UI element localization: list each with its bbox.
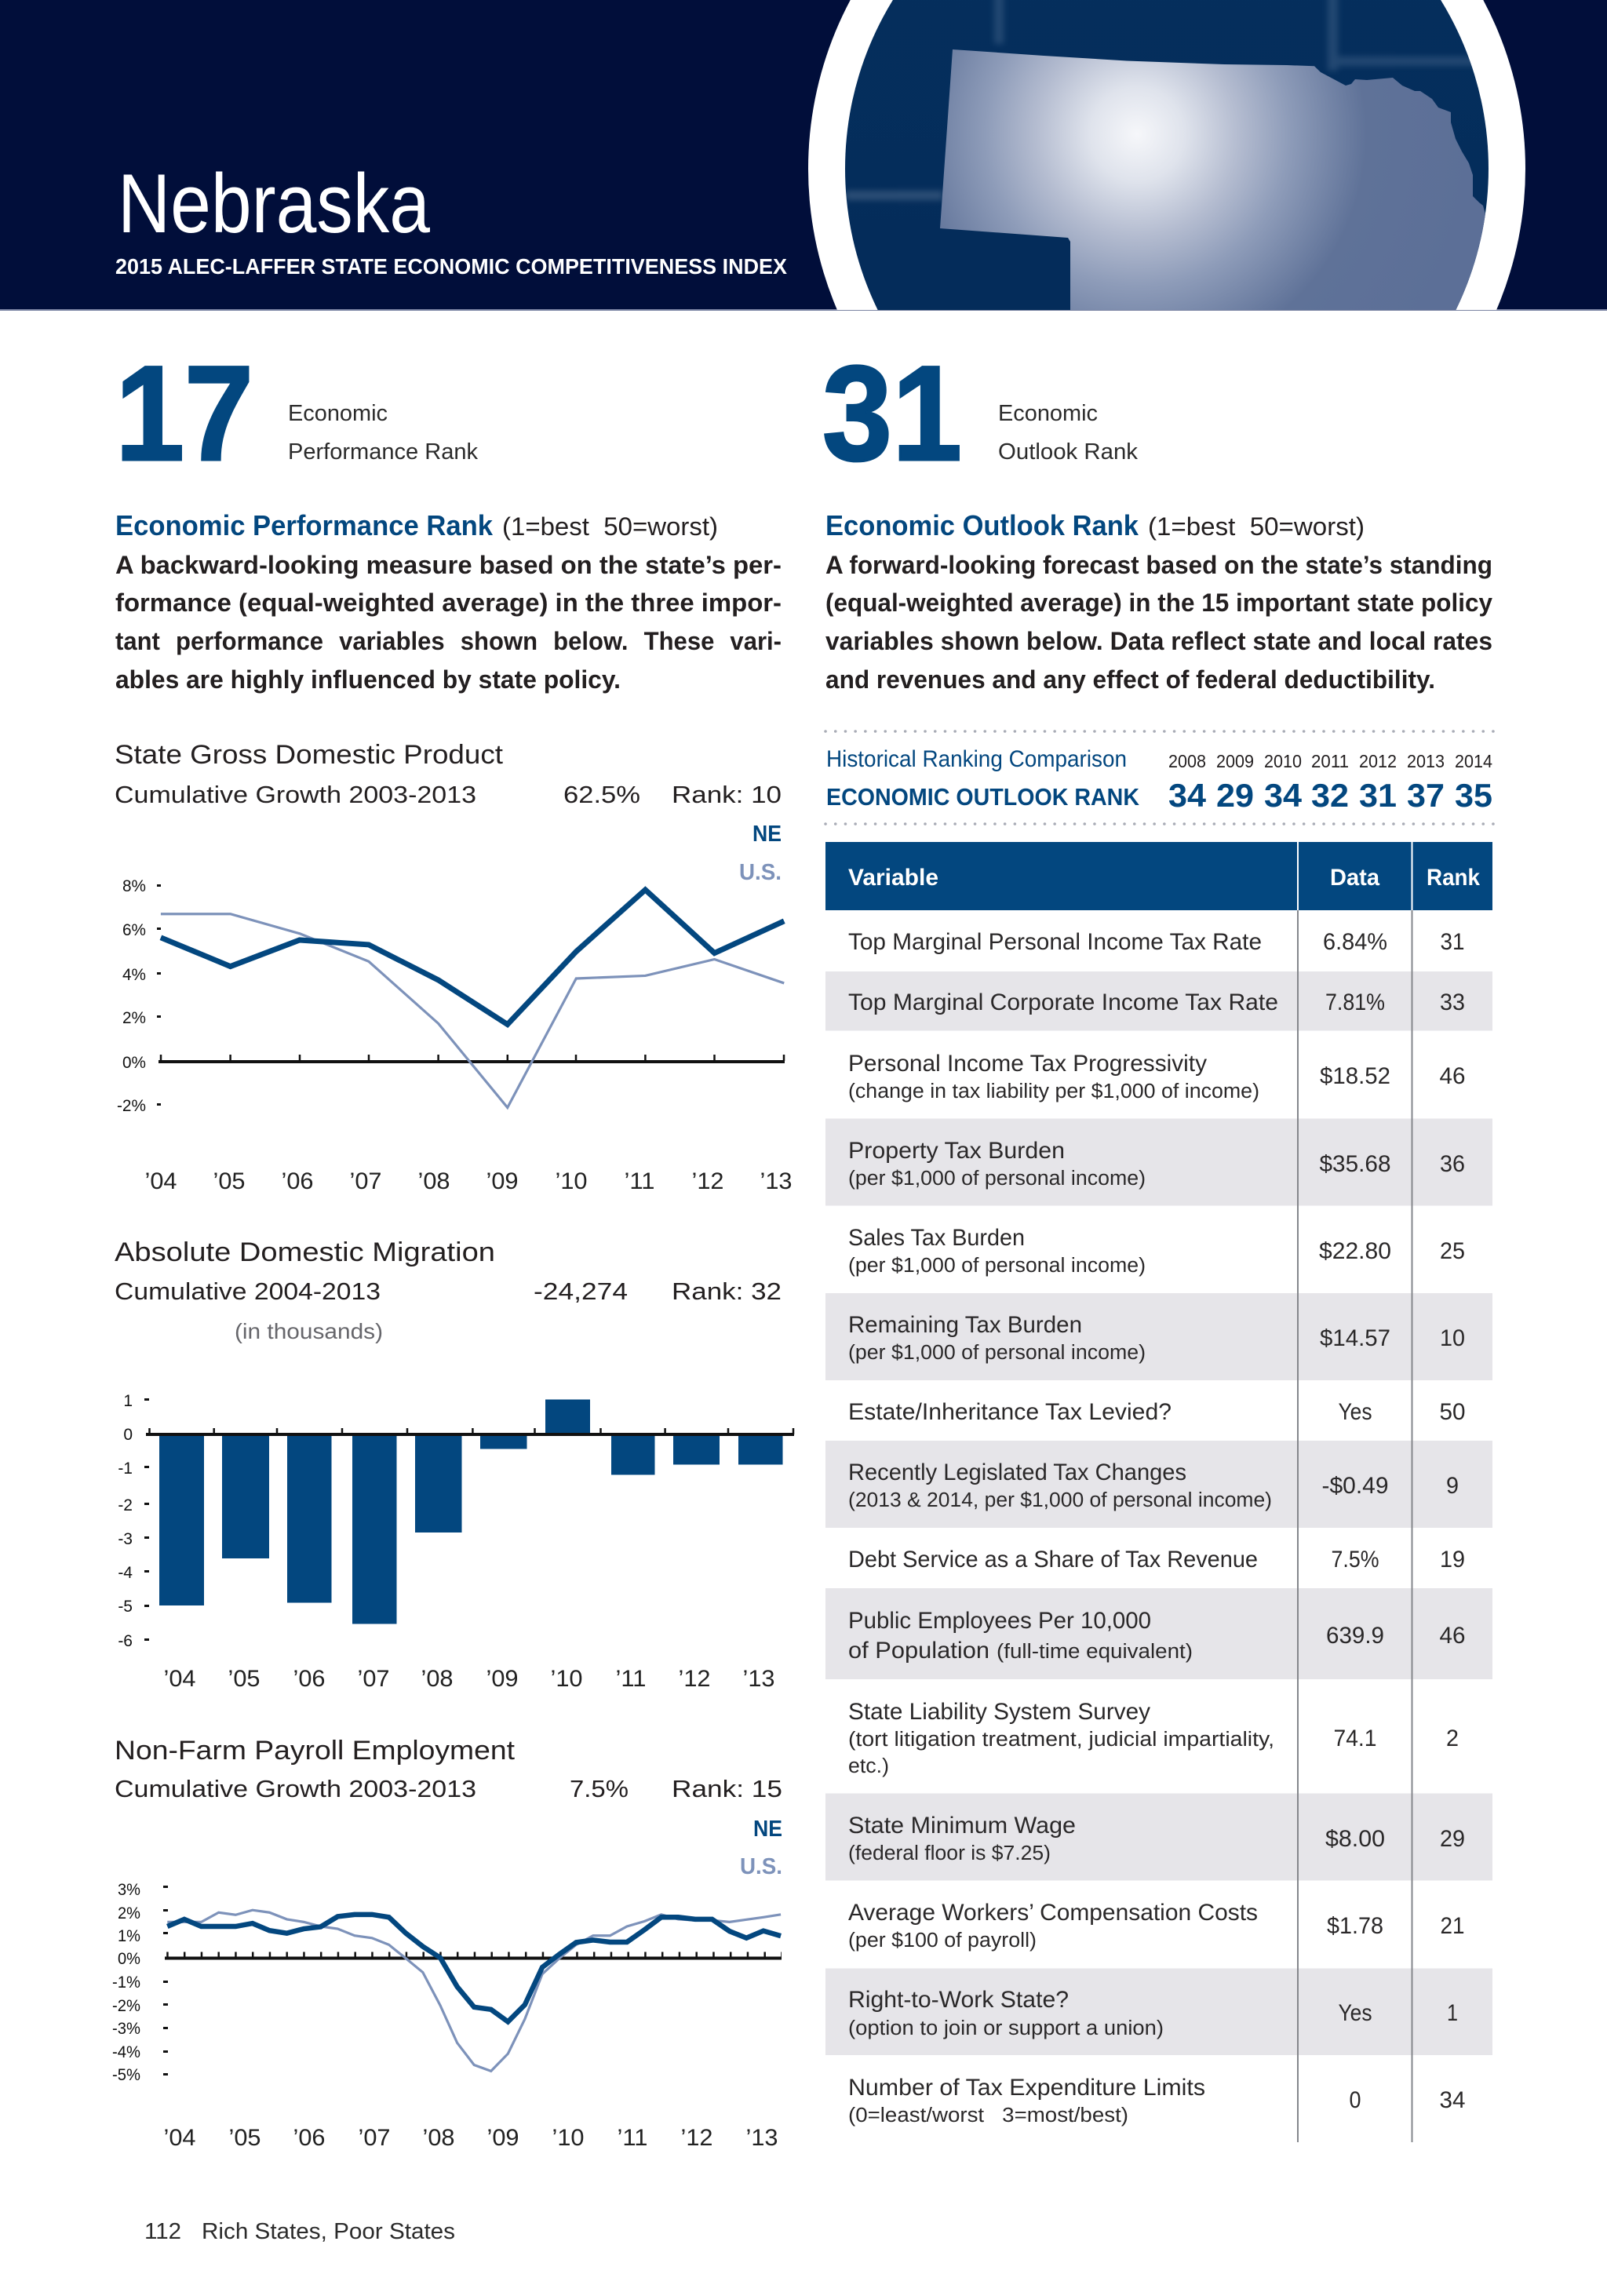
row: state liability system survey: etc.)	[848, 1755, 889, 1777]
row: number of tax expenditure limits	[848, 2075, 1466, 2127]
heading: Cumulative 2004-2013	[115, 1278, 381, 1305]
row: state minimum wage	[848, 1813, 1465, 1864]
line chart: payroll growth: ’04	[163, 2125, 196, 2151]
row: top marginal personal income tax rate: Top Marginal Personal Income Tax Rate	[848, 929, 1262, 955]
row: public employees per 10,000: 46	[1439, 1623, 1466, 1649]
row: debt service share of tax revenue	[848, 1547, 1465, 1573]
line chart: GDP growth	[117, 877, 793, 1194]
row: property tax burden: $35.68	[1320, 1151, 1390, 1177]
yearly rank numbers: 35	[1455, 777, 1492, 814]
text block: economic performance description: ables are highly influenced by state policy.	[115, 665, 621, 694]
line chart: GDP growth: ’06	[281, 1168, 314, 1194]
row: top marginal personal income tax rate: 31	[1441, 929, 1464, 955]
year labels: 2009	[1216, 751, 1254, 771]
row: average workers' compensation costs: 21	[1441, 1913, 1464, 1939]
text block: economic performance description: tant performance variables shown below. These vari-	[115, 627, 782, 655]
subtitle: 2015 ALEC-LAFFER STATE ECONOMIC COMPETITIVENESS INDEX	[115, 254, 787, 279]
year labels	[1168, 751, 1492, 771]
row: remaining tax burden: 10	[1440, 1325, 1465, 1351]
legend: U.S.	[740, 1854, 782, 1879]
text block: economic outlook description	[825, 509, 1492, 694]
year labels: 2012	[1359, 751, 1397, 771]
row: right-to-work state	[848, 1987, 1458, 2039]
heading: -24,274	[534, 1278, 628, 1305]
row: state liability system survey: (tort litigation treatment, judicial impartiality,	[848, 1729, 1274, 1751]
row: property tax burden: (per $1,000 of personal income)	[848, 1168, 1146, 1190]
line chart: GDP growth: ’09	[486, 1168, 518, 1194]
row: remaining tax burden: Remaining Tax Burden	[848, 1312, 1082, 1338]
heading: Rank: 15	[672, 1776, 782, 1802]
bar chart: migration: -6	[118, 1632, 133, 1650]
row: average workers' compensation costs	[848, 1900, 1464, 1952]
table header: Rank	[1427, 865, 1480, 891]
table: state policy variables	[825, 842, 1492, 2142]
row: state liability system survey: 2	[1446, 1726, 1459, 1751]
row: personal income tax progressivity: 46	[1439, 1063, 1466, 1089]
row: personal income tax progressivity: $18.52	[1320, 1063, 1390, 1089]
line chart: GDP growth: ’04	[144, 1168, 177, 1194]
row: estate/inheritance tax levied: Yes	[1339, 1399, 1372, 1425]
rank: economic performance 17: Performance Rank	[288, 439, 478, 465]
icon: Nebraska silhouette	[940, 49, 1495, 310]
text block: economic performance description: (1=best 50=worst)	[502, 512, 718, 541]
row: recently legislated tax changes: (2013 & 2014, per $1,000 of personal income)	[848, 1489, 1272, 1511]
row: remaining tax burden: $14.57	[1320, 1325, 1390, 1351]
row: sales tax burden	[848, 1225, 1465, 1277]
bar chart: migration: 1	[123, 1392, 133, 1410]
row: top marginal corporate income tax rate: Top Marginal Corporate Income Tax Rate	[848, 989, 1278, 1015]
line chart: GDP growth: ’08	[417, 1168, 450, 1194]
line chart: GDP growth: ’10	[556, 1168, 587, 1194]
text block: economic outlook description: (equal-weighted average) in the 15 important state policy	[825, 589, 1492, 617]
row: debt service share of tax revenue: 7.5%	[1331, 1547, 1379, 1573]
line chart: payroll growth: 2%	[118, 1904, 140, 1922]
bar chart: migration: ’07	[358, 1666, 389, 1692]
line chart: payroll growth: -2%	[112, 1997, 140, 2015]
row: top marginal corporate income tax rate: 33	[1440, 989, 1465, 1015]
line chart: payroll growth: ’12	[681, 2125, 712, 2151]
row: public employees per 10,000	[848, 1608, 1466, 1664]
row: state minimum wage: 29	[1440, 1826, 1465, 1852]
row: state minimum wage: $8.00	[1325, 1826, 1385, 1852]
row: debt service share of tax revenue: 19	[1440, 1547, 1465, 1573]
row: top marginal corporate income tax rate: 7.81%	[1325, 989, 1385, 1015]
row: personal income tax progressivity: Personal Income Tax Progressivity	[848, 1051, 1207, 1077]
row: public employees per 10,000: 639.9	[1326, 1623, 1384, 1649]
text block: economic performance description	[115, 509, 782, 694]
line chart: GDP growth: ’12	[692, 1168, 723, 1194]
table header: Data	[1330, 865, 1379, 891]
line chart: payroll growth: -3%	[112, 2020, 140, 2038]
year labels: 2008	[1168, 751, 1206, 771]
line chart: payroll growth: ’08	[422, 2125, 455, 2151]
panel: historical ranking comparison: ECONOMIC OUTLOOK RANK	[826, 783, 1140, 811]
bar chart: migration: ’05	[228, 1666, 261, 1692]
footer: 112	[144, 2219, 181, 2244]
bar chart: migration: -3	[118, 1530, 133, 1548]
heading	[115, 1736, 782, 1802]
heading: Absolute Domestic Migration	[115, 1237, 495, 1267]
year labels: 2014	[1455, 751, 1492, 771]
legend	[739, 822, 782, 885]
heading: State Gross Domestic Product	[115, 740, 504, 770]
row: property tax burden: 36	[1440, 1151, 1465, 1177]
row: number of tax expenditure limits: 34	[1439, 2087, 1466, 2113]
bar chart: migration: -2	[118, 1496, 133, 1514]
line chart: payroll growth: ’13	[745, 2125, 778, 2151]
legend: NE	[753, 1817, 782, 1842]
row: sales tax burden: $22.80	[1319, 1238, 1391, 1264]
text block: economic performance description: A backward-looking measure based on the state’s per-	[115, 551, 782, 579]
table header	[825, 842, 1492, 910]
rank: economic performance 17: 17	[115, 338, 253, 489]
heading: Cumulative Growth 2003-2013	[115, 1776, 476, 1802]
row: remaining tax burden: (per $1,000 of personal income)	[848, 1342, 1146, 1364]
panel: absolute domestic migration	[115, 1237, 794, 1692]
line chart: payroll growth: ’07	[358, 2125, 391, 2151]
line chart: payroll growth: -1%	[112, 1973, 140, 1992]
heading: 62.5%	[563, 782, 640, 808]
rank: economic outlook 31: 31	[822, 338, 962, 489]
row: state minimum wage: (federal floor is $7.25)	[848, 1842, 1051, 1864]
line chart: payroll growth: ’09	[486, 2125, 519, 2151]
row: sales tax burden: 25	[1440, 1238, 1465, 1264]
line chart: GDP growth: 0%	[122, 1054, 146, 1072]
text block: economic outlook description: (1=best 50=worst)	[1148, 512, 1365, 541]
line chart: GDP growth: -2%	[117, 1097, 146, 1115]
line chart: payroll growth: -4%	[112, 2043, 140, 2061]
title: Nebraska	[118, 156, 430, 250]
row: top marginal personal income tax rate	[848, 929, 1464, 955]
row: recently legislated tax changes	[848, 1460, 1459, 1511]
line chart: GDP growth: 4%	[122, 966, 146, 984]
row: recently legislated tax changes: -$0.49	[1321, 1473, 1389, 1499]
line chart: payroll growth: ’10	[552, 2125, 584, 2151]
row: estate/inheritance tax levied: 50	[1439, 1399, 1466, 1425]
line chart: payroll growth: 0%	[118, 1950, 140, 1968]
row: public employees per 10,000: (full-time equivalent)	[997, 1641, 1193, 1663]
legend: NE	[752, 822, 782, 847]
text block: economic outlook description: and revenues and any effect of federal deductibility.	[825, 665, 1435, 694]
heading: Cumulative Growth 2003-2013	[115, 782, 476, 808]
row: top marginal corporate income tax rate	[848, 989, 1465, 1015]
footer: Rich States, Poor States	[202, 2219, 455, 2244]
line chart: payroll growth: ’06	[293, 2125, 325, 2151]
row: public employees per 10,000: of Population	[848, 1638, 989, 1664]
line chart: GDP growth: ’13	[760, 1168, 793, 1194]
row: number of tax expenditure limits: 0	[1350, 2087, 1361, 2113]
yearly rank numbers: 37	[1407, 777, 1445, 814]
table header: Variable	[848, 865, 938, 891]
line chart: GDP growth: ’07	[350, 1168, 381, 1194]
state map medallion	[808, 0, 1525, 310]
row: sales tax burden: Sales Tax Burden	[848, 1225, 1025, 1251]
row: public employees per 10,000: Public Employees Per 10,000	[848, 1608, 1151, 1634]
heading: Non-Farm Payroll Employment	[115, 1736, 516, 1766]
row: top marginal personal income tax rate: 6.84%	[1323, 929, 1387, 955]
rank: economic outlook 31	[822, 338, 1139, 489]
row: state minimum wage: State Minimum Wage	[848, 1813, 1076, 1839]
line chart: GDP growth: 6%	[122, 921, 146, 939]
bar chart: migration: ’10	[551, 1666, 582, 1692]
yearly rank numbers: 34	[1264, 777, 1303, 814]
heading	[115, 740, 782, 808]
row: right-to-work state: Right-to-Work State?	[848, 1987, 1069, 2013]
row: state liability system survey	[848, 1699, 1459, 1777]
row: remaining tax burden	[848, 1312, 1465, 1364]
panel: historical ranking comparison: Historical Ranking Comparison	[826, 746, 1127, 772]
heading: 7.5%	[570, 1776, 629, 1802]
yearly rank numbers: 34	[1168, 777, 1207, 814]
yearly rank numbers: 32	[1311, 777, 1349, 814]
text block: economic performance description: Economic Performance Rank	[115, 509, 494, 541]
line chart: GDP growth: ’05	[213, 1168, 245, 1194]
row: sales tax burden: (per $1,000 of personal income)	[848, 1255, 1146, 1277]
rank: economic performance 17: Economic	[288, 401, 388, 426]
text block: economic outlook description: Economic Outlook Rank	[825, 509, 1139, 541]
row: personal income tax progressivity	[848, 1051, 1466, 1102]
line chart: payroll growth: 1%	[118, 1927, 140, 1945]
row: recently legislated tax changes: Recently Legislated Tax Changes	[848, 1460, 1186, 1485]
line chart: payroll growth	[112, 1881, 782, 2151]
line chart: payroll growth: ’11	[617, 2125, 648, 2151]
row: estate/inheritance tax levied	[848, 1399, 1466, 1425]
row: debt service share of tax revenue: Debt Service as a Share of Tax Revenue	[848, 1547, 1258, 1573]
bar chart: migration: ’12	[678, 1666, 711, 1692]
header banner	[0, 0, 1607, 311]
year labels: 2013	[1407, 751, 1445, 771]
text block: economic performance description: formance (equal-weighted average) in the three impor-	[115, 589, 782, 617]
yearly rank numbers	[1168, 777, 1492, 814]
heading: Rank: 32	[672, 1278, 782, 1305]
yearly rank numbers: 29	[1216, 777, 1254, 814]
heading	[115, 1237, 782, 1343]
bar chart: migration: ’06	[293, 1666, 325, 1692]
legend: U.S.	[739, 860, 782, 885]
bar chart: migration: -1	[118, 1460, 133, 1478]
heading: (in thousands)	[235, 1319, 383, 1343]
line chart: GDP growth: 8%	[122, 877, 146, 895]
text block: economic outlook description: variables shown below. Data reflect state and local rates	[825, 627, 1492, 655]
line chart: payroll growth: 3%	[118, 1881, 140, 1899]
row: right-to-work state: Yes	[1339, 2000, 1372, 2026]
bar chart: migration: ’13	[742, 1666, 775, 1692]
bar chart: migration: ’04	[163, 1666, 196, 1692]
row: average workers' compensation costs: (per $100 of payroll)	[848, 1930, 1037, 1952]
bar chart: migration	[118, 1392, 794, 1692]
text block: economic outlook description: A forward-looking forecast based on the state’s standing	[825, 551, 1492, 579]
row: average workers' compensation costs: $1.78	[1327, 1913, 1383, 1939]
panel: non-farm payroll employment	[112, 1736, 782, 2151]
row: property tax burden	[848, 1138, 1465, 1190]
panel: state gross domestic product	[115, 740, 793, 1194]
bar chart: migration: ’09	[486, 1666, 518, 1692]
row: number of tax expenditure limits: Number of Tax Expenditure Limits	[848, 2075, 1205, 2101]
bar chart: migration: ’11	[615, 1666, 647, 1692]
bar chart: migration: 0	[123, 1426, 133, 1444]
row: right-to-work state: 1	[1447, 2000, 1458, 2026]
rank: economic outlook 31: Economic	[998, 401, 1098, 426]
row: state liability system survey: State Liability System Survey	[848, 1699, 1150, 1725]
row: right-to-work state: (option to join or support a union)	[848, 2017, 1164, 2039]
row: number of tax expenditure limits: (0=least/worst 3=most/best)	[848, 2105, 1128, 2127]
line chart: payroll growth: -5%	[112, 2066, 140, 2084]
heading: Rank: 10	[672, 782, 782, 808]
legend	[740, 1817, 782, 1879]
panel: historical ranking comparison	[825, 731, 1493, 824]
rank: economic performance 17	[115, 338, 478, 489]
row: state liability system survey: 74.1	[1334, 1726, 1376, 1751]
bar chart: migration: -4	[118, 1564, 133, 1582]
bar chart: migration: -5	[118, 1598, 133, 1616]
table row stripes	[825, 971, 1492, 2055]
row: estate/inheritance tax levied: Estate/Inheritance Tax Levied?	[848, 1399, 1172, 1425]
line chart: GDP growth: ’11	[625, 1168, 654, 1194]
rank: economic outlook 31: Outlook Rank	[998, 439, 1139, 465]
bar chart: migration: ’08	[421, 1666, 454, 1692]
line chart: payroll growth: ’05	[229, 2125, 261, 2151]
row: average workers' compensation costs: Average Workers’ Compensation Costs	[848, 1900, 1258, 1926]
year labels: 2010	[1264, 751, 1302, 771]
yearly rank numbers: 31	[1359, 777, 1397, 814]
row: personal income tax progressivity: (change in tax liability per $1,000 of income)	[848, 1081, 1259, 1102]
line chart: GDP growth: 2%	[122, 1009, 146, 1027]
year labels: 2011	[1311, 751, 1349, 771]
row: recently legislated tax changes: 9	[1446, 1473, 1459, 1499]
row: property tax burden: Property Tax Burden	[848, 1138, 1065, 1164]
